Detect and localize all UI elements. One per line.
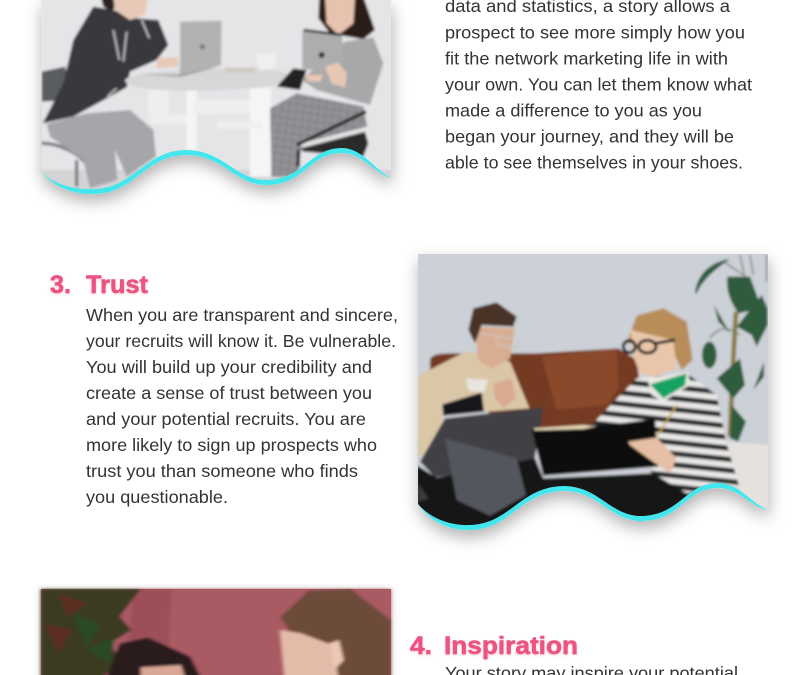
text block: story benefits: able to see themselves in your shoes. [445,152,743,172]
photo: man and woman with notebooks at a desk [417,252,770,532]
text block: story benefits: fit the network marketing life in with [445,48,728,68]
text block: trust: When you are transparent and sincere, [86,305,398,325]
text block: trust: and your potential recruits. You are [86,409,366,429]
heading: 4. Inspiration: Inspiration [444,632,578,660]
text block: trust: your recruits will know it. Be vulnerable. [86,331,396,351]
text block: trust: You will build up your credibility and [86,357,372,377]
text block: trust: more likely to sign up prospects who [86,435,377,455]
photo: two women at a white table [40,0,393,194]
photo: two women in front of a pink wall [41,589,391,675]
text block: story benefits: prospect to see more simply how you [445,22,745,42]
text block: story benefits: made a difference to you as you [445,100,702,120]
heading: 3. Trust: Trust [86,271,149,299]
heading: 3. Trust: 3. [50,271,71,299]
text block: story benefits: began your journey, and they will be [445,126,734,146]
text block: story benefits: your own. You can let them know what [445,74,752,94]
text block: trust: create a sense of trust between you [86,383,372,403]
heading: 3. Trust [50,271,149,299]
text block: trust: trust you than someone who finds [86,461,358,481]
text block: story benefits [445,0,752,172]
text block: trust [86,305,398,507]
text block: trust: you questionable. [86,487,228,507]
heading: 4. Inspiration: 4. [410,632,432,660]
